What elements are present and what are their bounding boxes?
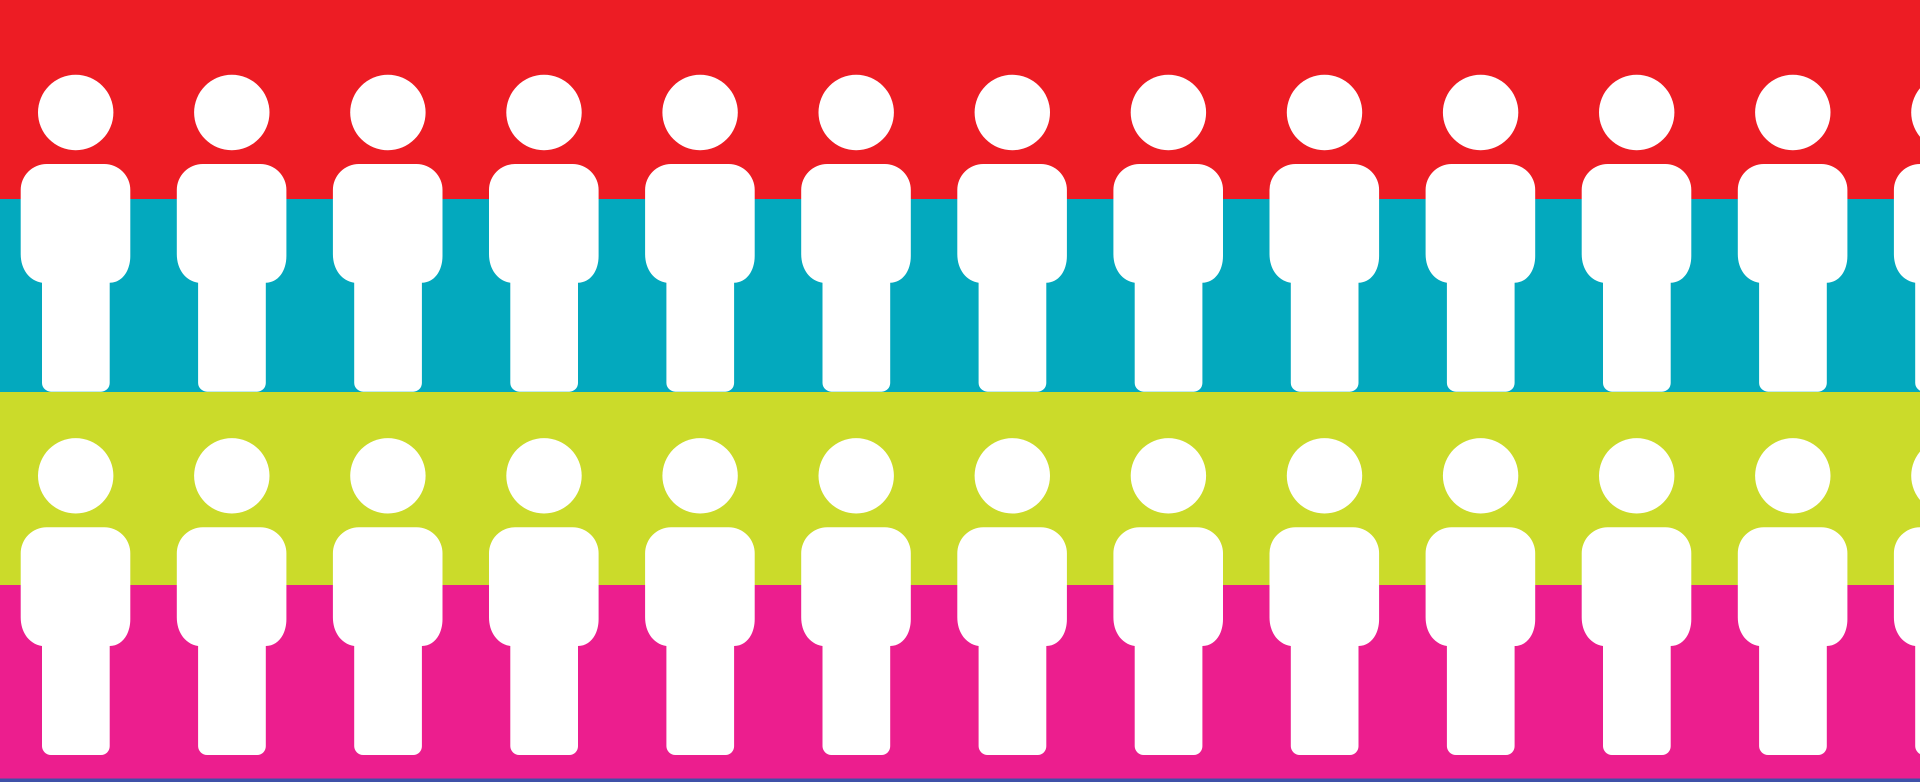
icon: person 6 [801,75,911,392]
icon: person 13 (cropped) [1894,438,1920,755]
icon: person 7 [957,75,1067,392]
icon: person 12 [1738,75,1847,392]
row of people: top [21,75,1920,392]
icon: person 3 [333,75,442,392]
icon: person 3 [333,438,442,755]
icon: person 4 [489,438,599,755]
icon: person 5 [645,438,755,755]
icon: person 8 [1113,438,1223,755]
icon: person 9 [1270,438,1379,755]
icon: person 1 [21,75,130,392]
icon: person 13 (cropped) [1894,75,1920,392]
icon: person 7 [957,438,1067,755]
icon: person 6 [801,438,911,755]
icon: person 2 [177,75,286,392]
icon: person 10 [1426,438,1535,755]
icon: person 4 [489,75,599,392]
icon: person 8 [1113,75,1223,392]
band: magenta [0,585,1920,778]
band: blue bottom edge [0,778,1920,782]
icon: person 11 [1582,75,1691,392]
icon: person 1 [21,438,130,755]
icon: person 12 [1738,438,1847,755]
band: red [0,0,1920,199]
band: teal [0,199,1920,392]
band: lime [0,392,1920,585]
icon: person 9 [1270,75,1379,392]
icon: person 11 [1582,438,1691,755]
icon: person 2 [177,438,286,755]
icon: person 5 [645,75,755,392]
icon: person 10 [1426,75,1535,392]
row of people: bottom [21,438,1920,755]
